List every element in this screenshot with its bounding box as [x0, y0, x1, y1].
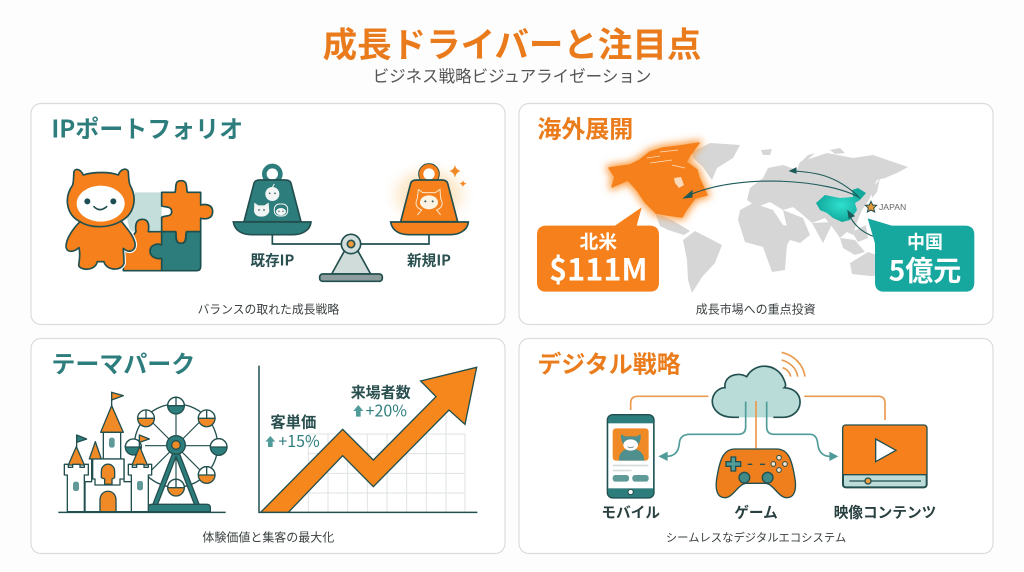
chart: growth arrow	[259, 366, 477, 512]
panel: theme park	[31, 338, 505, 554]
heading: IP portfolio: IPポートフォリオ	[51, 109, 243, 144]
heading: theme park: テーマパーク	[51, 344, 195, 379]
label: spend per customer: +15%	[278, 428, 320, 452]
caption: 成長市場への重点投資	[696, 300, 816, 317]
callout: China	[868, 218, 974, 292]
icon: existing IP weight	[233, 166, 311, 235]
icon: balance scale	[233, 158, 477, 281]
arrows	[684, 168, 875, 237]
icon: mascot	[66, 169, 135, 269]
label: spend per customer	[265, 410, 320, 452]
world map	[609, 143, 908, 293]
icon: phone	[607, 415, 654, 498]
callout: North America: $111M	[549, 244, 648, 289]
callout: North America: 北米	[580, 227, 617, 254]
label: mobile: モバイル	[601, 502, 660, 523]
subtitle: ビジネス戦略ビジュアライゼーション	[373, 63, 651, 87]
label: spend per customer: 客単価	[270, 410, 316, 432]
icon: ferris wheel	[125, 397, 227, 512]
label: game: ゲーム	[734, 502, 778, 523]
label: visitors: +20%	[366, 398, 407, 422]
icon: star Japan	[865, 201, 877, 212]
panel: IP portfolio	[31, 104, 505, 324]
icon: new IP weight	[391, 164, 468, 235]
icon: puzzle	[123, 181, 213, 271]
label: visitors: 来場者数	[351, 381, 411, 402]
icon: castle	[64, 392, 152, 512]
icon: cloud	[712, 366, 800, 417]
ground line	[58, 510, 226, 515]
heading: digital strategy: デジタル戦略	[537, 344, 681, 379]
label: Japan: JAPAN	[879, 202, 906, 212]
label: video content: 映像コンテンツ	[834, 502, 936, 523]
title: 成長ドライバーと注目点	[323, 17, 701, 67]
label: visitors	[351, 381, 411, 422]
connectors	[631, 396, 885, 461]
panel: digital strategy	[519, 338, 993, 554]
caption: 体験価値と集客の最大化	[202, 529, 334, 546]
callout: North America	[537, 207, 659, 292]
region: North America	[609, 143, 707, 217]
region: China	[816, 188, 866, 222]
label: existing IP: 既存IP	[250, 250, 295, 271]
heading: overseas expansion: 海外展開	[537, 109, 633, 144]
callout: China: 中国	[907, 228, 943, 254]
icon: video player	[843, 425, 927, 488]
icon: game controller	[716, 449, 795, 498]
caption: シームレスなデジタルエコシステム	[666, 530, 846, 546]
caption: バランスの取れた成長戦略	[197, 300, 339, 317]
icon: wifi waves	[782, 352, 805, 377]
label: new IP: 新規IP	[407, 250, 451, 271]
callout: China: 5億元	[889, 249, 961, 289]
panel: overseas expansion	[519, 104, 993, 324]
